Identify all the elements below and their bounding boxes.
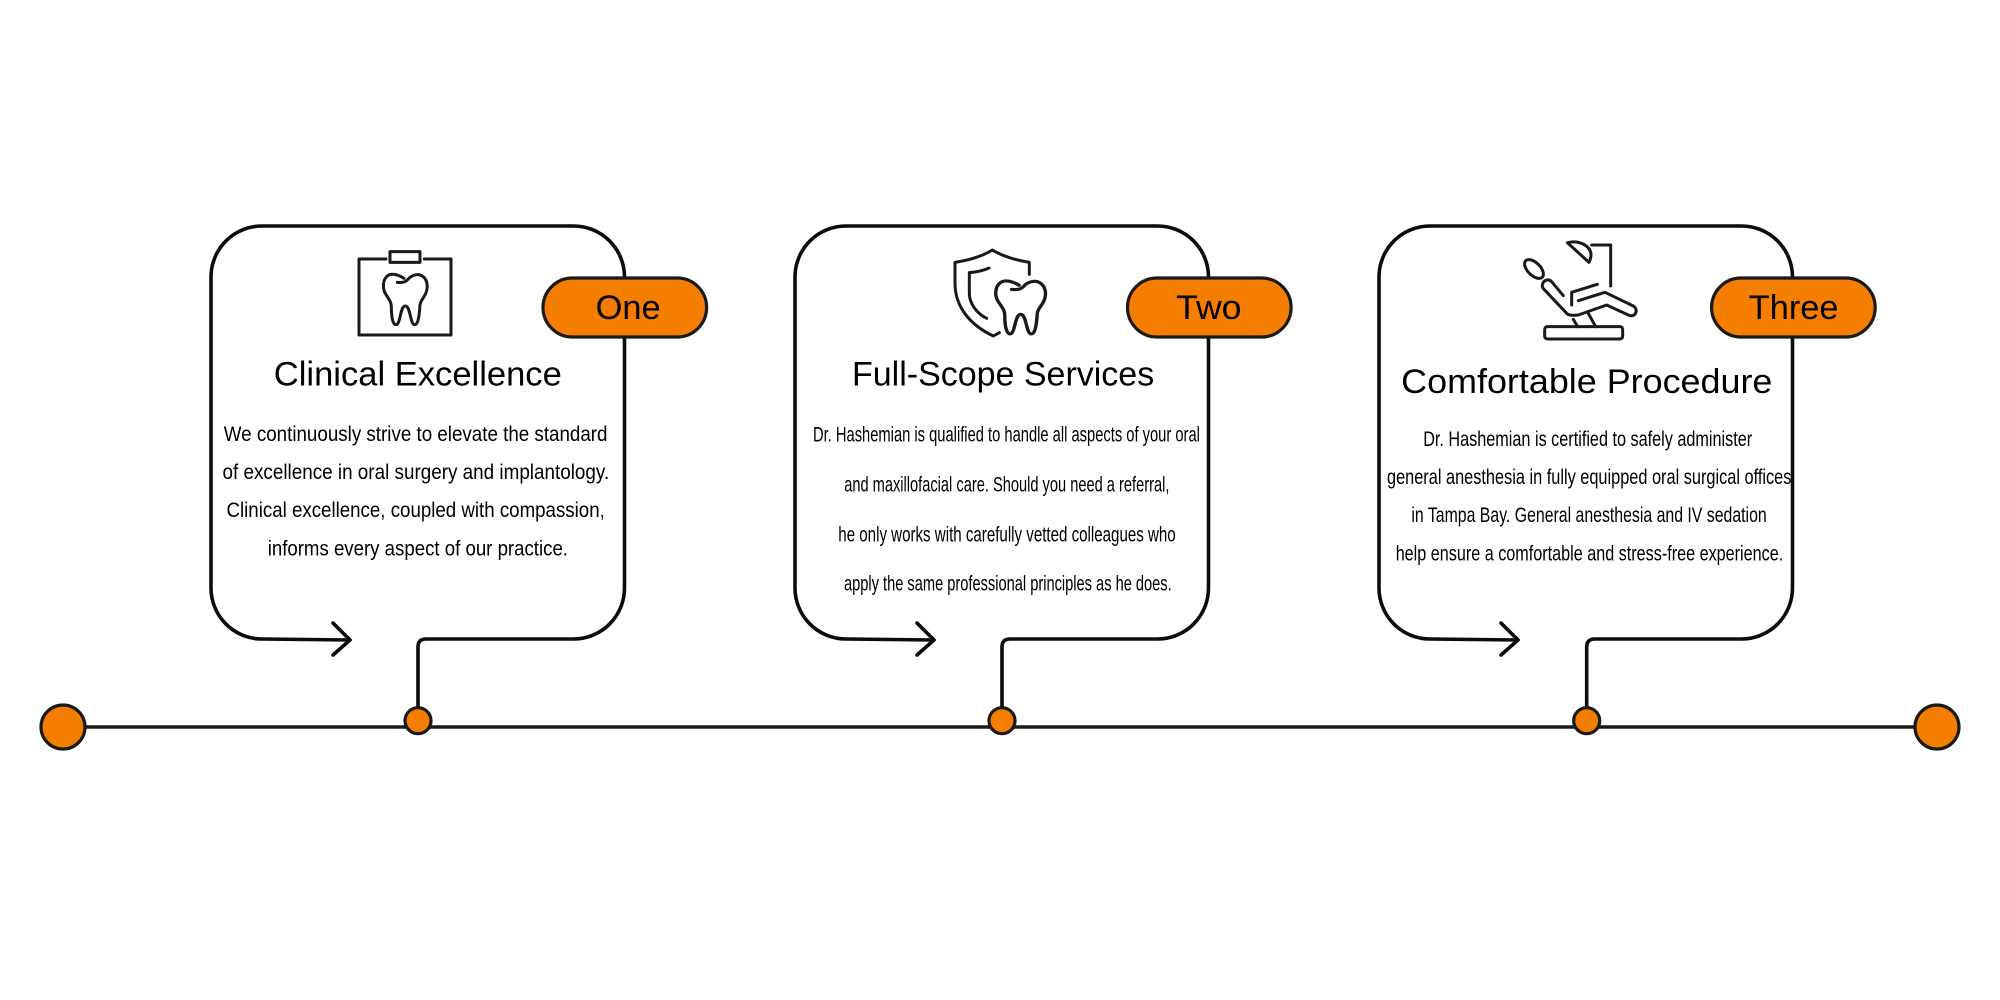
body text: of excellence in oral surgery and implantology. — [222, 461, 609, 484]
body text: and maxillofacial care. Should you need a referral, — [844, 474, 1169, 497]
body text: Clinical excellence, coupled with compassion, — [226, 499, 605, 522]
body text: he only works with carefully vetted colleagues who — [838, 524, 1176, 547]
body text — [222, 423, 609, 560]
body text — [813, 424, 1200, 596]
badge: One: One — [596, 289, 661, 327]
badge: Three: Three — [1749, 289, 1838, 327]
connector node — [989, 708, 1015, 734]
timeline start marker — [41, 705, 85, 749]
icon: shield and tooth — [955, 250, 1045, 336]
panel: full-scope services — [795, 226, 1291, 734]
body text: in Tampa Bay. General anesthesia and IV sedation — [1411, 504, 1767, 527]
panel: clinical excellence — [211, 226, 707, 734]
body text: informs every aspect of our practice. — [268, 538, 568, 560]
card outline with arrow and connector — [795, 226, 1208, 708]
card outline with arrow and connector — [1379, 226, 1792, 708]
connector node — [405, 708, 431, 734]
body text: help ensure a comfortable and stress-free experience. — [1396, 543, 1783, 566]
body text: general anesthesia in fully equipped oral surgical offices — [1387, 466, 1791, 489]
timeline axis — [63, 725, 1937, 729]
icon: tooth x-ray — [359, 252, 451, 335]
body text: Dr. Hashemian is certified to safely administer — [1423, 428, 1752, 451]
panel: comfortable procedure — [1379, 226, 1875, 734]
heading: Full-Scope Services: Full-Scope Services — [852, 356, 1154, 394]
body text: We continuously strive to elevate the standard — [224, 423, 608, 446]
connector node — [1574, 708, 1600, 734]
body text: apply the same professional principles as he does. — [844, 573, 1172, 596]
heading: Clinical Excellence: Clinical Excellence — [274, 356, 562, 394]
body text — [1387, 428, 1791, 566]
card outline with arrow and connector — [211, 226, 624, 708]
badge: Two — [1128, 278, 1291, 337]
heading: Comfortable Procedure: Comfortable Procedure — [1401, 363, 1772, 401]
icon: dental chair — [1521, 242, 1636, 339]
badge: One — [543, 278, 707, 337]
badge: Two: Two — [1176, 289, 1242, 327]
timeline end marker — [1915, 705, 1959, 749]
badge: Three — [1712, 278, 1875, 337]
body text: Dr. Hashemian is qualified to handle all aspects of your oral — [813, 424, 1200, 447]
